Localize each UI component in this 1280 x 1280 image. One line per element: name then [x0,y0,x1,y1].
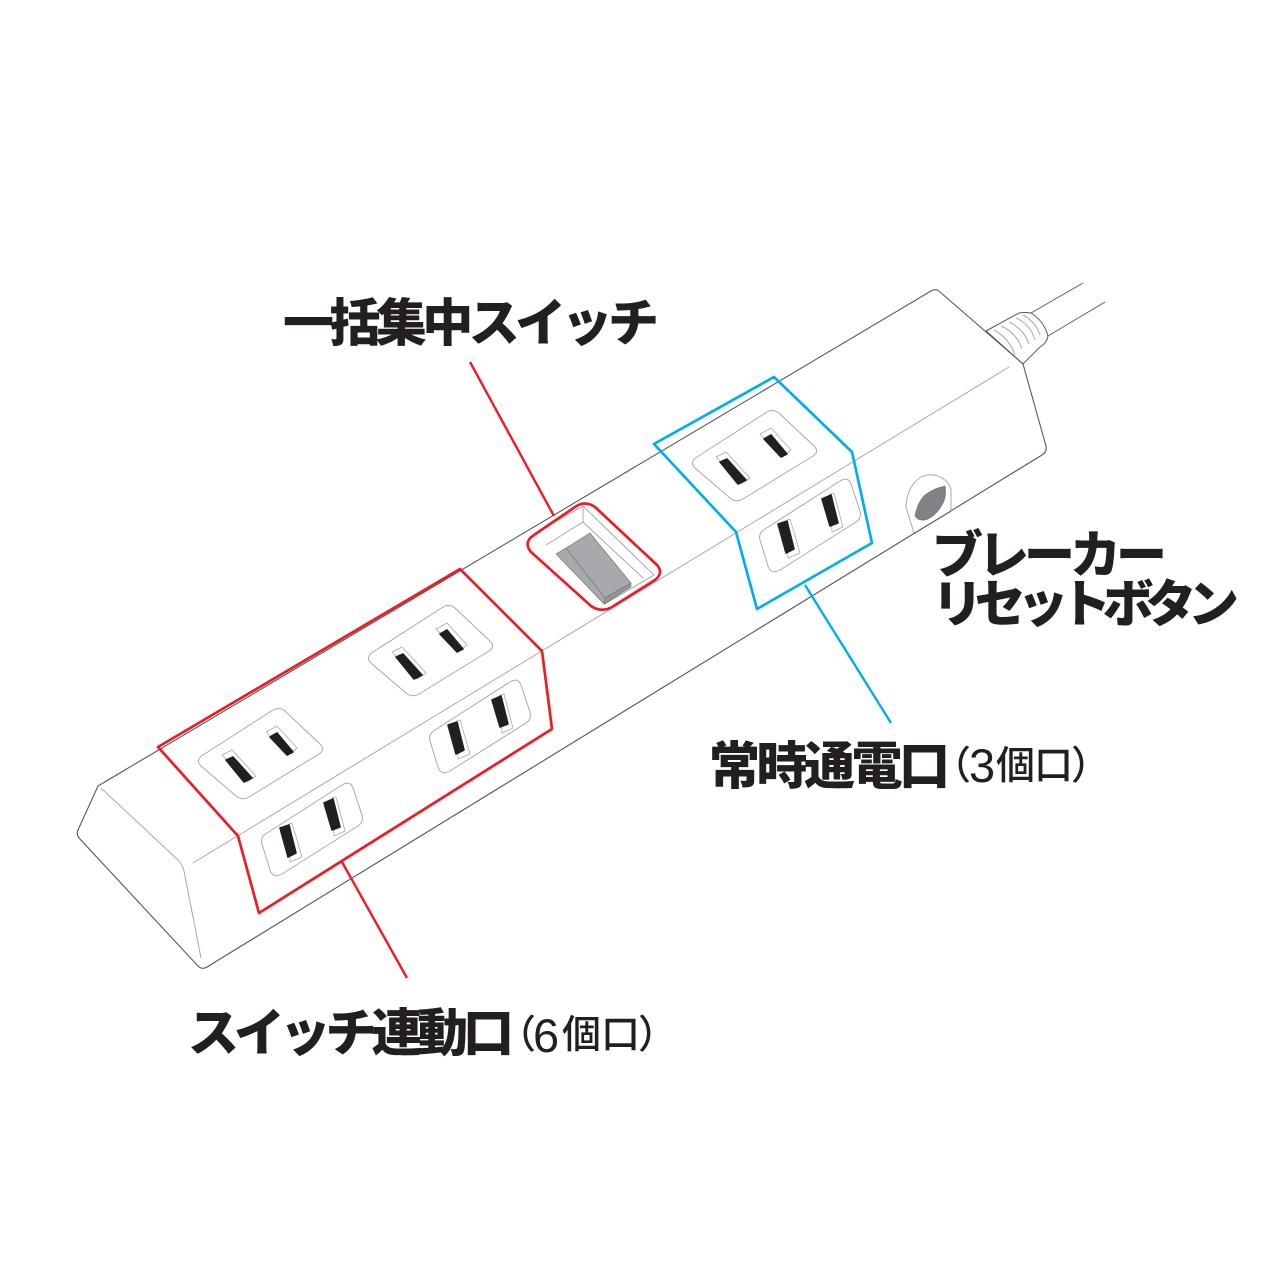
strip edges [986,331,1023,364]
label: switched outlets: スイッチ連動口 [188,1005,514,1062]
label: always-on outlets: （ [932,745,971,788]
strip body outline [77,290,1046,968]
outlet: switched front right [430,680,530,773]
label: always-on outlets [709,738,1110,795]
label: switched outlets: 6 [533,1009,559,1062]
label: breaker reset button [932,527,1239,633]
power strip illustration [77,283,1105,968]
blue leader: always-on outlets [805,585,891,723]
blue outline: always-on outlets [654,377,872,609]
label: always-on outlets: ） [1071,745,1110,788]
label: switched outlets [188,1005,677,1062]
power cord [986,283,1105,364]
label: master switch: 一括集中スイッチ [283,295,659,352]
label: breaker reset button: リセットボタン [932,576,1239,633]
label: always-on outlets: 口 [1034,745,1073,788]
red leader: master switch [470,362,554,516]
label: switched outlets: ） [638,1014,677,1057]
red leader: switched outlets [342,862,407,978]
label: always-on outlets: 常時通電口 [709,738,950,795]
master switch [535,506,654,604]
label: switched outlets: 口 [601,1014,640,1057]
red outline: switched outlets [158,569,552,913]
outlet: switched front left [262,783,362,876]
outlet: switched top left [198,708,323,799]
outlet: always-on top [692,410,817,501]
label: breaker reset button: ブレーカー [932,527,1167,584]
red outline: master switch [528,504,660,610]
outlet: always-on front [760,479,860,572]
label: switched outlets: （ [497,1014,536,1057]
breaker reset button [906,475,951,534]
label: always-on outlets: 個 [996,745,1035,788]
outlet: switched top right [368,605,493,696]
label: always-on outlets: 3 [969,739,995,792]
label: switched outlets: 個 [562,1014,601,1057]
